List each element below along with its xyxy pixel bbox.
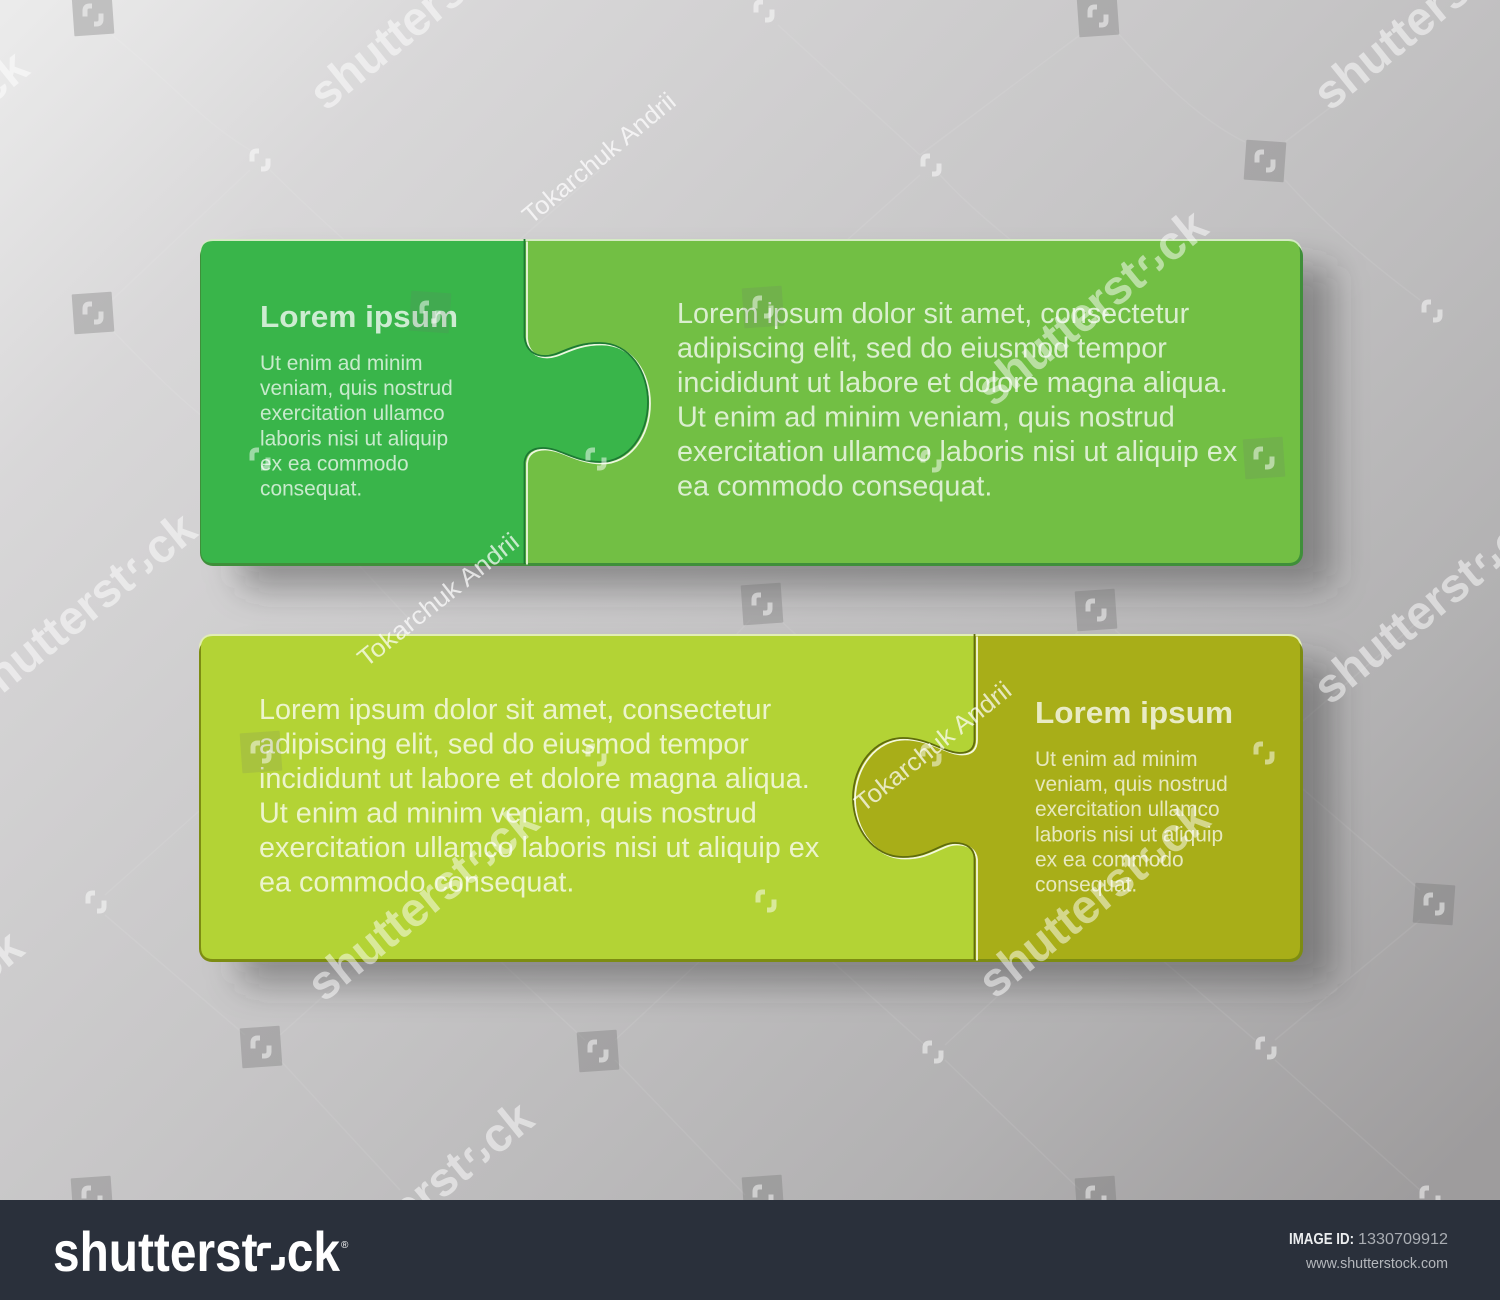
seam highlight — [855, 636, 977, 960]
bottom banner drop shadow — [240, 662, 1332, 984]
bottom banner edges — [199, 634, 1303, 962]
image id: IMAGE ID: — [1289, 1231, 1354, 1248]
top banner edges — [200, 239, 1303, 566]
heading: left piece: Lorem ipsum — [260, 299, 458, 334]
seam shadow — [524, 239, 648, 564]
text block: right piece: Ut enim ad minim — [1035, 748, 1198, 771]
text block: right piece: Lorem ipsum dolor sit amet, consectetur — [677, 298, 1190, 330]
top banner drop shadow — [240, 266, 1332, 588]
text block: right piece: Ut enim ad minim veniam, quis nostrud — [677, 402, 1175, 434]
text block: left piece: consequat. — [260, 478, 362, 500]
piece: light green right — [525, 241, 1300, 563]
footer logo: ® — [341, 1240, 349, 1251]
watermark wordmarks: shutterstock — [967, 199, 1218, 417]
text block: left piece: exercitation ullamco — [260, 402, 445, 425]
text block: right piece: ex ea commodo — [1035, 848, 1184, 872]
footer logo: shutterstock — [53, 1220, 341, 1283]
text block: right piece: exercitation ullamco laboris nisi ut aliquip ex — [677, 436, 1238, 468]
text block: right piece — [1035, 748, 1228, 896]
heading: right piece: Lorem ipsum — [1035, 695, 1233, 730]
text block: left piece: incididunt ut labore et dolore magna aliqua. — [259, 763, 810, 795]
piece: lime left with socket — [201, 636, 975, 959]
text block: right piece: exercitation ullamco — [1035, 798, 1220, 821]
text block: right piece — [677, 298, 1238, 502]
text block: left piece: ea commodo consequat. — [259, 866, 574, 898]
text block: right piece: veniam, quis nostrud — [1035, 773, 1228, 796]
seam highlight — [527, 242, 650, 564]
website url: www.shutterstock.com — [1305, 1256, 1448, 1272]
panel: top banner — [200, 239, 1332, 588]
text block: right piece: adipiscing elit, sed do eiusmod tempor — [677, 332, 1167, 364]
text block: left piece: Ut enim ad minim veniam, quis nostrud — [259, 798, 757, 830]
text block: left piece: ex ea commodo — [260, 452, 409, 476]
text block: left piece: exercitation ullamco laboris nisi ut aliquip ex — [259, 832, 820, 864]
text block: left piece — [259, 694, 820, 898]
text block: left piece: Ut enim ad minim — [260, 352, 423, 375]
author watermarks: Tokarchuk Andrii — [517, 87, 681, 230]
author watermarks — [352, 87, 1017, 818]
text block: left piece — [260, 352, 453, 500]
author watermarks: Tokarchuk Andrii — [849, 676, 1017, 818]
watermark wordmarks: shutterstock — [969, 791, 1220, 1009]
text block: left piece: adipiscing elit, sed do eiusmod tempor — [259, 728, 749, 760]
text block: right piece: incididunt ut labore et dolore magna aliqua. — [677, 367, 1228, 399]
text block: left piece: Lorem ipsum dolor sit amet, consectetur — [259, 694, 772, 726]
piece: dark green left with knob — [201, 241, 648, 563]
panel: bottom banner — [199, 634, 1332, 984]
seam shadow — [853, 634, 975, 960]
text block: left piece: laboris nisi ut aliquip — [260, 428, 448, 450]
text block: right piece: ea commodo consequat. — [677, 470, 992, 502]
watermark wordmarks: shutterstock — [298, 794, 549, 1012]
text block: right piece: laboris nisi ut aliquip — [1035, 824, 1223, 846]
image id: 1330709912 — [1358, 1231, 1448, 1248]
image id — [1289, 1231, 1448, 1248]
watermark web lines — [105, 25, 1420, 1195]
footer bar — [0, 1200, 1500, 1300]
text block: right piece: consequat. — [1035, 874, 1137, 896]
piece: olive right with knob — [853, 636, 1300, 959]
author watermarks: Tokarchuk Andrii — [352, 528, 525, 673]
text block: left piece: veniam, quis nostrud — [260, 377, 453, 400]
